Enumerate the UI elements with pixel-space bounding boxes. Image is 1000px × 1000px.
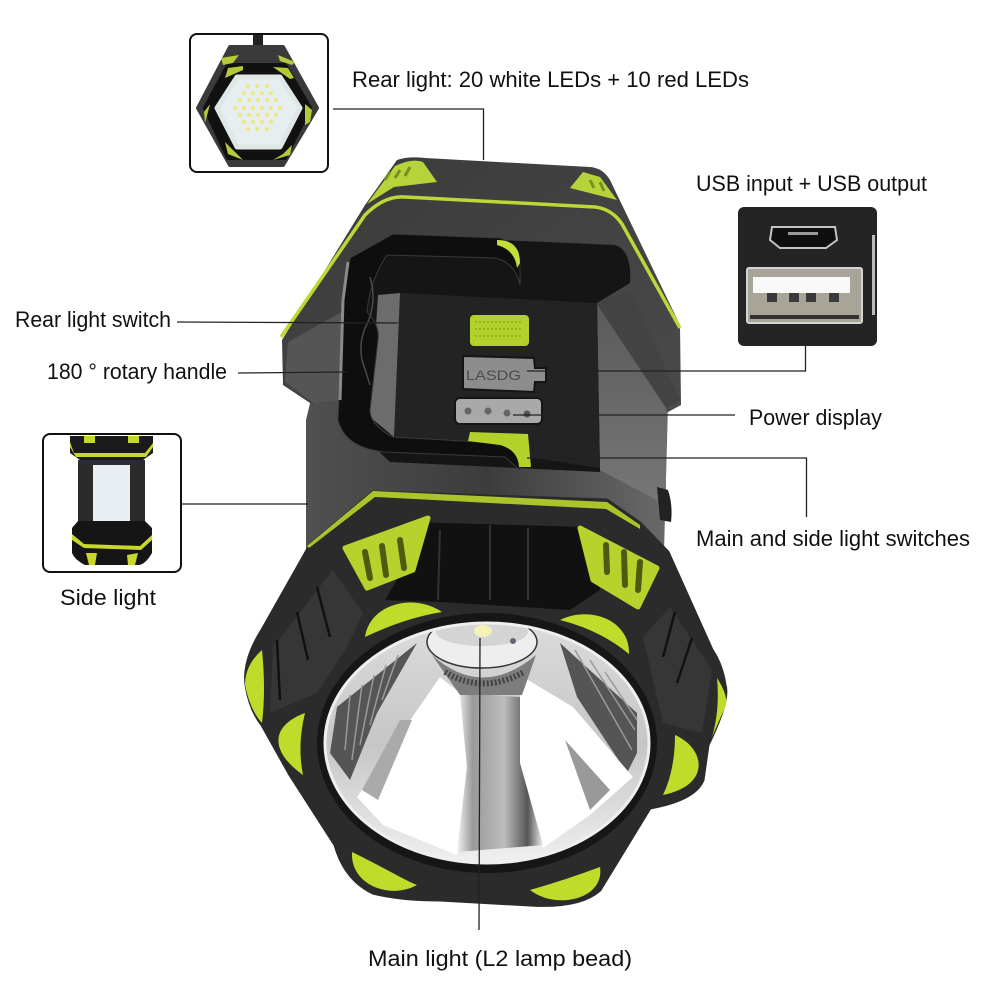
label: rotary handle: 180 ° rotary handle — [47, 359, 227, 384]
side switch — [657, 487, 672, 522]
label: main light: Main light (L2 lamp bead) — [368, 946, 632, 971]
label: main and side light switches: Main and side light switches — [696, 526, 970, 551]
control buttons — [455, 315, 546, 467]
callout lines — [177, 109, 806, 930]
handle and control recess — [338, 234, 630, 472]
flashlight product photo — [245, 157, 726, 905]
inset: side light — [43, 434, 181, 572]
rear body — [281, 157, 681, 552]
inset: rear light — [190, 34, 328, 172]
label: side light: Side light — [60, 585, 157, 610]
USB-A port — [747, 268, 862, 323]
control buttons: LASDG — [466, 367, 521, 383]
yellow stripe — [281, 197, 680, 337]
label: rear light: Rear light: 20 white LEDs + 10 red LEDs — [352, 67, 749, 92]
label: USB: USB input + USB output — [696, 171, 928, 196]
micro USB port — [770, 227, 837, 248]
inset: USB ports — [738, 207, 877, 346]
main reflector lens — [326, 624, 648, 862]
label: rear light switch: Rear light switch — [15, 307, 171, 332]
label: power display: Power display — [749, 405, 883, 430]
front head — [245, 491, 726, 905]
LED array — [233, 84, 282, 131]
